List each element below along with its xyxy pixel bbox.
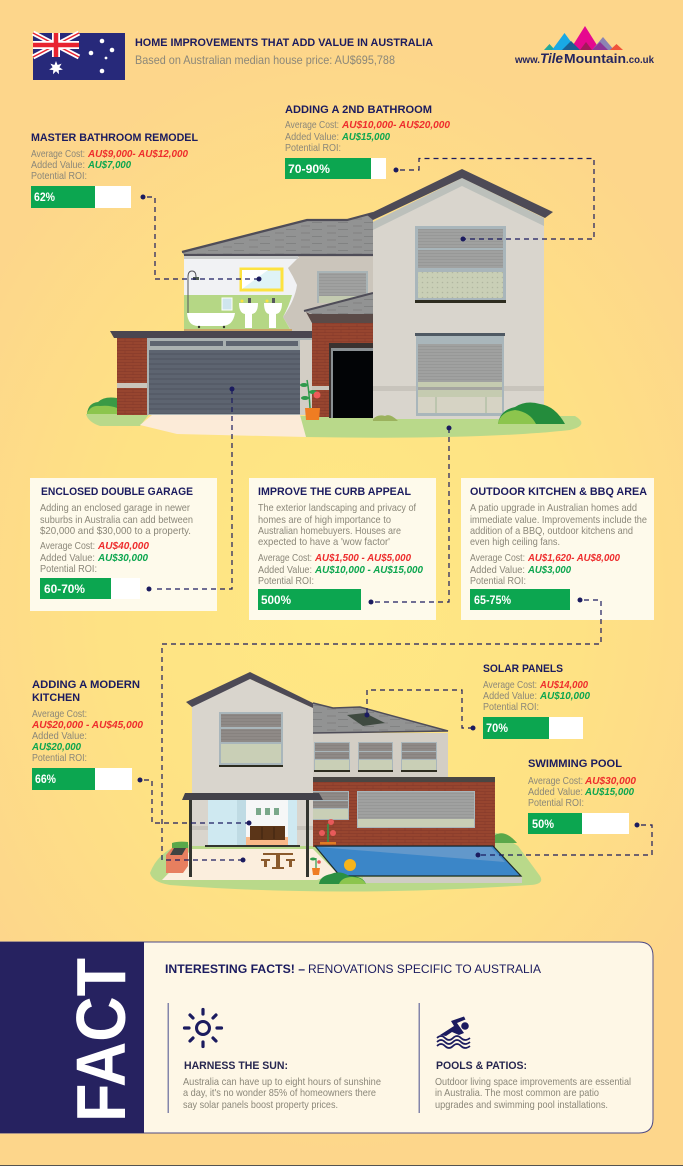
panel: master bathroom remodel: AU$9,000- AU$12,000 <box>87 148 188 160</box>
bush left <box>87 398 117 414</box>
logo: Tile Mountain: Tile <box>540 50 563 66</box>
panel: enclosed double garage: AU$30,000 <box>97 552 148 564</box>
panel: outdoor kitchen and bbq area: immediate value. Improvements include the <box>470 514 647 526</box>
panel: adding a 2nd bathroom <box>285 104 450 179</box>
header: subtitle: Based on Australian median house price: AU$695,788 <box>135 53 395 67</box>
lawn <box>150 833 541 892</box>
panel: master bathroom remodel <box>31 132 198 208</box>
logo: Tile Mountain: Mountain <box>564 51 626 66</box>
panel: outdoor kitchen and bbq area: Potential ROI: <box>470 575 526 587</box>
panel: master bathroom remodel: MASTER BATHROOM REMODEL <box>31 132 198 144</box>
fact: harness the sun: a day, it's no wonder 85% of homeowners there <box>183 1087 376 1099</box>
panel: adding a 2nd bathroom: ADDING A 2ND BATHROOM <box>285 104 432 116</box>
panel: adding a 2nd bathroom: AU$15,000 <box>341 131 390 143</box>
upper side window <box>317 271 368 303</box>
connector: garage <box>146 386 234 592</box>
panel: enclosed double garage <box>30 478 217 611</box>
panel: enclosed double garage: Adding an enclosed garage in newer <box>40 502 190 514</box>
patio table <box>261 853 295 869</box>
panel: adding a modern kitchen: 66% <box>35 774 56 786</box>
bush right <box>373 403 565 424</box>
panel: outdoor kitchen and bbq area <box>461 478 654 620</box>
illustration: front of house <box>86 169 581 438</box>
connector: modern kitchen <box>138 778 252 826</box>
plant pot <box>300 380 320 420</box>
panel: enclosed double garage: Average Cost: <box>40 540 95 552</box>
brick extension windows <box>313 791 475 828</box>
connector: solar panels <box>364 690 476 730</box>
pool <box>315 846 522 883</box>
panel: improve the curb appeal: homes are of high importance to <box>258 514 391 526</box>
panel: master bathroom remodel: Average Cost: <box>31 148 85 160</box>
panel: master bathroom remodel: AU$7,000 <box>87 159 131 171</box>
panel: improve the curb appeal: 500% <box>261 595 291 607</box>
upper wall <box>184 255 374 333</box>
header: title: HOME IMPROVEMENTS THAT ADD VALUE IN AUSTRALIA <box>135 37 433 49</box>
panel: enclosed double garage: ENCLOSED DOUBLE GARAGE <box>41 486 193 498</box>
upper storey <box>186 672 317 846</box>
fact: pools and patios: in Australia. The most common are patio <box>435 1087 599 1099</box>
panel: solar panels: SOLAR PANELS <box>483 663 563 675</box>
panel: adding a 2nd bathroom: Potential ROI: <box>285 142 341 154</box>
panel: improve the curb appeal: Added Value: <box>258 564 312 576</box>
solar panel on roof <box>347 713 385 726</box>
panel: adding a modern kitchen: ADDING A MODERN <box>32 679 140 691</box>
panel: master bathroom remodel: 62% <box>34 192 55 204</box>
panel: swimming pool: AU$15,000 <box>584 786 634 798</box>
panel: adding a modern kitchen: Potential ROI: <box>32 752 87 764</box>
panel: solar panels: AU$14,000 <box>539 679 588 691</box>
fact: pools and patios: Outdoor living space improvements are essential <box>435 1076 631 1088</box>
upper window <box>219 712 283 767</box>
panel: improve the curb appeal: AU$10,000 - AU$15,000 <box>314 564 423 576</box>
panel: adding a 2nd bathroom: Added Value: <box>285 131 339 143</box>
icon: sun <box>184 1010 222 1046</box>
panel: adding a modern kitchen: AU$20,000 - AU$45,000 <box>31 719 143 731</box>
panel: adding a modern kitchen: Added Value: <box>32 730 87 742</box>
patio doors and interior <box>205 800 300 847</box>
panel: outdoor kitchen and bbq area: 65-75% <box>474 595 511 607</box>
panel: improve the curb appeal: Australian homebuyers. Houses are <box>258 525 401 537</box>
main two-storey block <box>367 169 553 419</box>
panel: enclosed double garage: $20,000 and $30,000 to a property. <box>40 525 191 537</box>
fact heading: INTERESTING FACTS! – <box>165 962 305 976</box>
panel: fact band <box>0 942 653 1133</box>
roof edge <box>182 213 373 255</box>
panel: improve the curb appeal: IMPROVE THE CURB APPEAL <box>258 486 411 498</box>
panel: adding a modern kitchen <box>31 679 143 790</box>
small porch roof <box>304 293 373 323</box>
icon: swimmer <box>437 1016 470 1048</box>
panel: swimming pool: 50% <box>532 819 554 831</box>
patio floor <box>162 849 337 880</box>
mirror <box>241 269 282 290</box>
panel: adding a 2nd bathroom: AU$10,000- AU$20,000 <box>341 119 450 131</box>
fact: harness the sun <box>168 1003 381 1113</box>
lower roof <box>182 213 373 255</box>
panel: adding a modern kitchen: KITCHEN <box>32 692 80 704</box>
panel: master bathroom remodel: Added Value: <box>31 159 85 171</box>
fact: pools and patios: POOLS & PATIOS: <box>436 1060 527 1072</box>
brick extension <box>313 777 495 847</box>
panel: enclosed double garage: 60-70% <box>44 584 85 596</box>
garage <box>110 331 312 415</box>
lower window <box>415 333 505 416</box>
upper window <box>415 226 506 303</box>
panel: improve the curb appeal: Potential ROI: <box>258 575 314 587</box>
panel: outdoor kitchen and bbq area: A patio upgrade in Australian homes add <box>470 502 637 514</box>
panel: adding a 2nd bathroom: Average Cost: <box>285 119 339 131</box>
side roof <box>313 703 448 733</box>
panel: solar panels: Potential ROI: <box>483 701 539 713</box>
panel: outdoor kitchen and bbq area: AU$3,000 <box>527 564 571 576</box>
plants and bushes <box>310 819 517 884</box>
panel: solar panels: Added Value: <box>483 690 537 702</box>
panel: outdoor kitchen and bbq area: even high ceiling fans. <box>470 536 560 548</box>
fact label: FACT <box>62 958 140 1122</box>
outdoor bbq <box>166 842 188 873</box>
fact: harness the sun: HARNESS THE SUN: <box>184 1060 288 1072</box>
panel: improve the curb appeal <box>249 478 436 620</box>
panel: solar panels: AU$10,000 <box>539 690 590 702</box>
panel: solar panels <box>483 663 590 739</box>
connector: second bathroom <box>394 158 594 242</box>
connector: master bathroom <box>140 194 262 282</box>
panel: swimming pool: Average Cost: <box>528 775 583 787</box>
panel: improve the curb appeal: The exterior landscaping and privacy of <box>258 502 416 514</box>
panel: solar panels: 70% <box>486 723 508 735</box>
logo: Tile Mountain: www. <box>514 55 540 66</box>
patio roof and posts <box>182 793 323 877</box>
panel: swimming pool: Potential ROI: <box>528 797 584 809</box>
illustration: back of house <box>150 672 541 892</box>
panel: swimming pool: AU$30,000 <box>584 775 636 787</box>
fact: harness the sun: Australia can have up to eight hours of sunshine <box>183 1076 381 1088</box>
fact: pools and patios <box>418 1003 631 1113</box>
connector: outdoor kitchen <box>162 598 601 862</box>
fact heading <box>165 962 541 976</box>
panel: outdoor kitchen and bbq area: Average Cost: <box>470 552 525 564</box>
panel: outdoor kitchen and bbq area: AU$1,620- AU$8,000 <box>527 552 620 564</box>
panel: outdoor kitchen and bbq area: addition of a BBQ, outdoor kitchens and <box>470 525 633 537</box>
panel: enclosed double garage: suburbs in Australia can add between <box>40 514 193 526</box>
panel: adding a modern kitchen: AU$20,000 <box>31 741 81 753</box>
panel: enclosed double garage: Potential ROI: <box>40 563 97 575</box>
panel: outdoor kitchen and bbq area: OUTDOOR KITCHEN & BBQ AREA <box>470 486 647 498</box>
panel: swimming pool: Added Value: <box>528 786 583 798</box>
logo: Tile Mountain <box>514 26 654 66</box>
bathroom cutaway <box>184 256 299 332</box>
panel: swimming pool: SWIMMING POOL <box>528 758 622 770</box>
connector: curb appeal <box>368 426 452 604</box>
fact: harness the sun: say solar panels boost property prices. <box>183 1099 338 1111</box>
panel: improve the curb appeal: AU$1,500 - AU$5,000 <box>314 552 411 564</box>
panel: swimming pool <box>528 758 636 834</box>
panel: solar panels: Average Cost: <box>483 679 537 691</box>
side wall <box>313 733 448 778</box>
connector: swimming pool <box>476 822 652 858</box>
panel: adding a 2nd bathroom: 70-90% <box>288 164 330 176</box>
panel: enclosed double garage: AU$40,000 <box>97 540 149 552</box>
porch brick and door <box>312 323 373 418</box>
header: flag <box>33 33 125 80</box>
panel: enclosed double garage: Added Value: <box>40 552 95 564</box>
panel: improve the curb appeal: expected to have a 'wow factor' <box>258 536 390 548</box>
three side windows <box>314 742 437 772</box>
panel: adding a modern kitchen: Average Cost: <box>32 708 87 720</box>
panel: outdoor kitchen and bbq area: Added Value: <box>470 564 525 576</box>
fact: pools and patios: upgrades and swimming pool installations. <box>435 1099 608 1111</box>
panel: master bathroom remodel: Potential ROI: <box>31 170 87 182</box>
fact heading: RENOVATIONS SPECIFIC TO AUSTRALIA <box>308 962 541 976</box>
panel: improve the curb appeal: Average Cost: <box>258 552 312 564</box>
grass and driveway <box>86 413 581 438</box>
logo: Tile Mountain: .co.uk <box>626 55 654 66</box>
